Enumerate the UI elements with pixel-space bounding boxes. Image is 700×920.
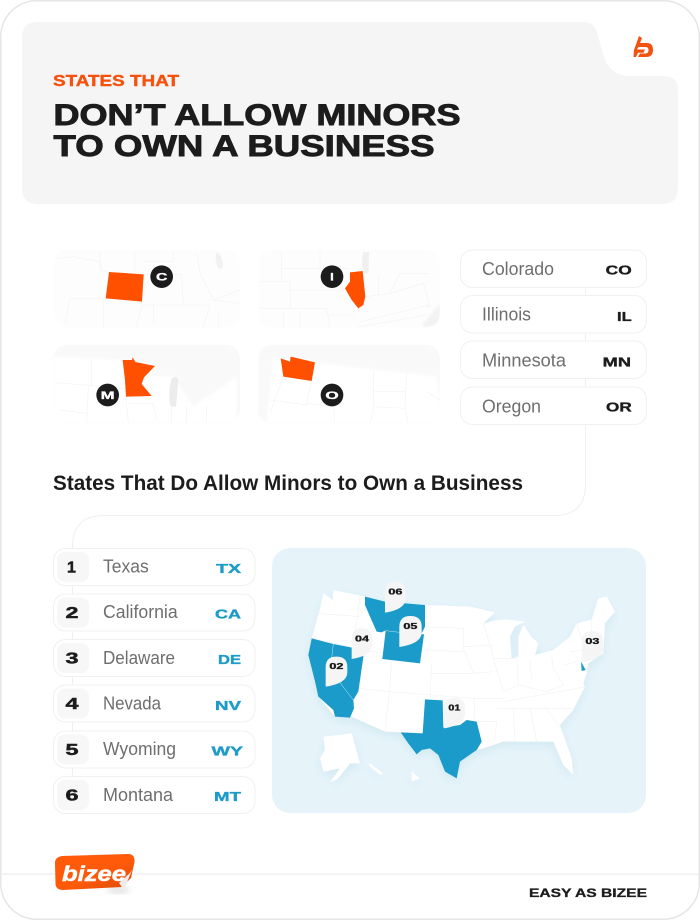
row: Oregon (460, 387, 646, 424)
row: California: 2 (66, 605, 79, 622)
pin 02 (326, 657, 347, 687)
pin 05 (399, 616, 422, 647)
header panel (22, 22, 678, 204)
row: Minnesota: Minnesota (482, 351, 567, 371)
row: Minnesota (460, 341, 646, 378)
map: Alaska and Hawaii (320, 733, 420, 782)
row: Montana (54, 776, 255, 814)
row: Texas: Texas (103, 557, 149, 577)
state: Nevada (331, 644, 364, 700)
list: states that don't allow (460, 250, 646, 424)
pin 05: 05 (403, 622, 418, 631)
row: Nevada: Nevada (103, 694, 162, 714)
pin 04: 04 (355, 634, 370, 643)
row: Delaware: DE (218, 652, 241, 667)
row: Texas: TX (216, 561, 241, 576)
title: DON’T ALLOW MINORS (54, 99, 460, 132)
row: Nevada: 4 (66, 696, 79, 713)
row: California: California (103, 602, 179, 622)
badge: O (321, 384, 343, 406)
badge: C: C (156, 272, 167, 284)
row: Texas (54, 548, 255, 586)
row: Texas: 1 (67, 560, 76, 576)
row: Oregon: Oregon (482, 396, 541, 416)
state: Delaware (581, 662, 586, 671)
pin 06 (385, 582, 406, 613)
row: Montana: MT (214, 789, 241, 804)
subheading: States That Do Allow Minors to Own a Business (53, 472, 523, 495)
row: California: CA (215, 606, 242, 622)
row: Wyoming: 5 (66, 742, 79, 759)
tagline: EASY AS BIZEE (529, 888, 647, 900)
pin 06: 06 (388, 588, 403, 597)
eyebrow: states that: STATES THAT (53, 73, 180, 90)
row: Minnesota: MN (603, 354, 631, 369)
title: TO OWN A BUSINESS (54, 130, 434, 163)
logo: bizee (55, 854, 135, 893)
row: Delaware: 3 (66, 650, 79, 668)
connector lines (72, 287, 586, 776)
pin 03 (582, 631, 603, 662)
map: state borders (312, 597, 603, 742)
row: Colorado: CO (606, 262, 632, 278)
row: Illinois (460, 296, 646, 333)
logo: bizee: bizee (62, 863, 126, 886)
row: Nevada: NV (215, 698, 241, 713)
row: Wyoming (54, 731, 255, 768)
row: Delaware (54, 640, 255, 676)
row: Illinois: Illinois (482, 305, 531, 325)
row: California (54, 594, 255, 631)
row: Oregon: OR (606, 400, 633, 415)
badge: I (321, 265, 343, 288)
badge: M (96, 384, 119, 406)
icon: bizee mark (634, 36, 653, 57)
pin 02: 02 (329, 662, 344, 671)
pin 04 (352, 628, 372, 659)
pin 01 (444, 698, 465, 728)
map: Colorado (53, 250, 240, 327)
state map thumbnails (53, 250, 443, 423)
badge: M: M (101, 390, 115, 402)
row: Montana: 6 (66, 788, 79, 804)
footer rule (1, 874, 699, 875)
row: Montana: Montana (103, 785, 174, 805)
badge: O: O (325, 390, 339, 402)
pin 03: 03 (585, 637, 600, 646)
map: Minnesota (57, 358, 207, 423)
map: Illinois (258, 250, 440, 327)
state: Wyoming (382, 631, 424, 663)
map: contiguous US (308, 590, 615, 778)
pin 01: 01 (448, 704, 461, 713)
badge: I: I (330, 272, 334, 284)
row: Illinois: IL (617, 309, 632, 324)
state: Texas (401, 699, 482, 778)
panel: US map (272, 548, 646, 813)
row: Wyoming: Wyoming (103, 739, 176, 759)
row: Delaware: Delaware (103, 648, 175, 668)
row: Colorado (460, 250, 646, 288)
row: Colorado: Colorado (482, 259, 554, 279)
state: California (308, 638, 354, 718)
list: states that allow (54, 548, 255, 814)
badge: C (150, 265, 173, 288)
state: Montana (365, 597, 425, 633)
map: Oregon (270, 356, 440, 423)
states highlighted (308, 597, 586, 778)
row: Wyoming: WY (212, 744, 243, 758)
row: Nevada (54, 685, 255, 722)
